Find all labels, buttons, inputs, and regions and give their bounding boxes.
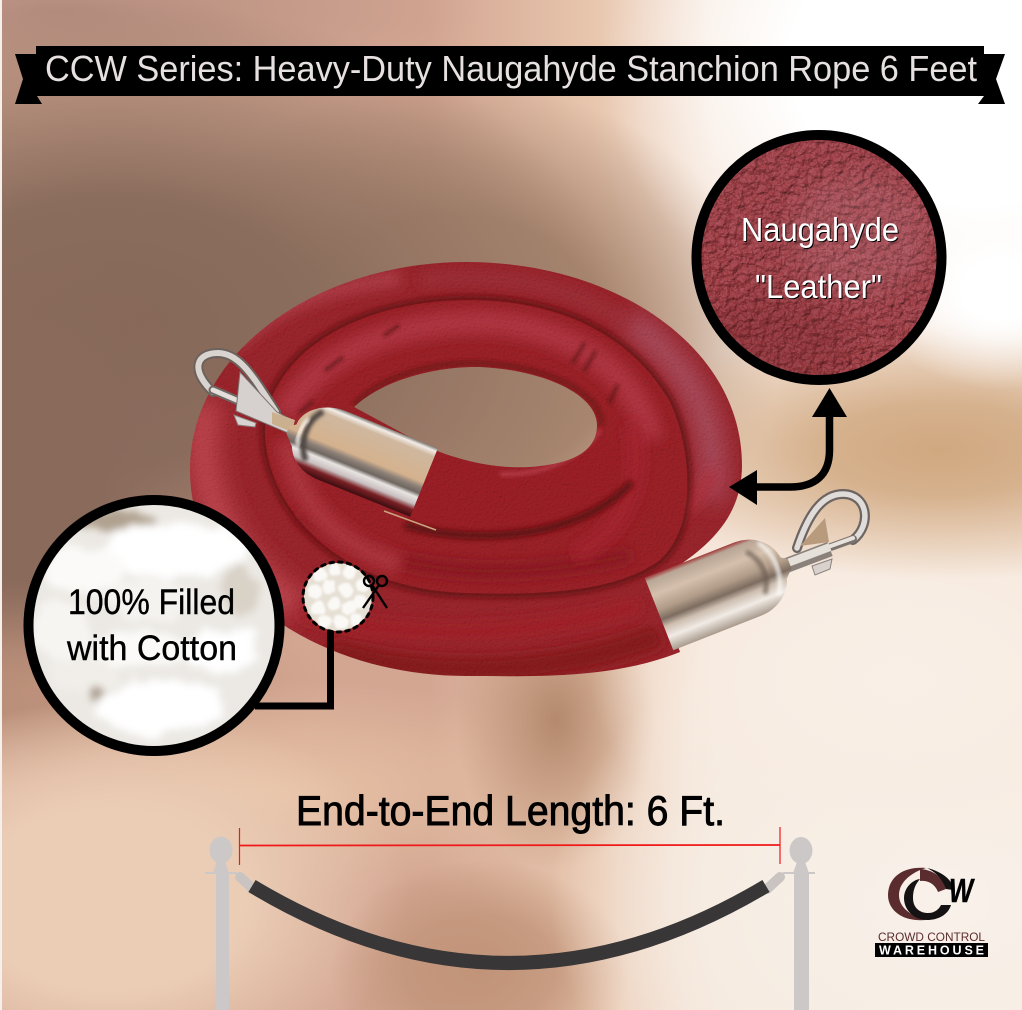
callout text line 2: with Cotton xyxy=(66,629,237,668)
rope wrinkles xyxy=(300,326,617,412)
logo mark black arc xyxy=(904,868,953,920)
cotton filling xyxy=(304,563,372,631)
callout: 100% filled with cotton xyxy=(28,500,280,751)
logo: Crowd Control Warehouse xyxy=(875,868,988,958)
upper rope end: chrome cap and snap hook xyxy=(198,353,438,517)
title text: CCW Series: Heavy-Duty Naugahyde Stanchion Rope 6 Feet xyxy=(45,48,977,89)
chrome cap xyxy=(645,526,804,650)
stanchion post left xyxy=(205,836,237,1010)
logo mark maroon inner arc xyxy=(920,869,946,892)
leather texture xyxy=(702,140,936,375)
cutaway showing cotton filling xyxy=(302,561,387,633)
coiled red rope xyxy=(180,255,750,685)
logo W: W xyxy=(949,872,975,909)
ribbon tail left xyxy=(15,54,42,104)
logo line 1: CROWD CONTROL xyxy=(878,932,986,944)
chrome cap xyxy=(275,394,438,517)
middle coil xyxy=(265,300,687,594)
length heading: End-to-End Length: 6 Ft. xyxy=(296,787,725,834)
leather grain xyxy=(180,255,750,685)
snap hook xyxy=(785,494,865,566)
callout text shadow: Naugahyde xyxy=(742,212,900,249)
banner bar xyxy=(36,46,984,96)
ribbon tail right xyxy=(978,54,1005,104)
logo bar xyxy=(875,943,988,957)
callout text: Naugahyde xyxy=(741,211,899,248)
callout: Naugahyde leather xyxy=(690,134,943,382)
connector line from cutaway to cotton callout xyxy=(255,630,330,706)
cotton photo xyxy=(30,502,278,750)
circle border xyxy=(696,135,942,380)
red dimension line xyxy=(240,827,780,865)
outer coil shading xyxy=(203,400,300,610)
tan reflection under cap xyxy=(384,511,436,530)
circle border xyxy=(28,500,280,751)
lower rope end: chrome cap and snap hook xyxy=(645,494,865,650)
dashed border xyxy=(303,562,373,632)
logo line 2: WAREHOUSE xyxy=(879,944,984,958)
callout text line 1: 100% Filled xyxy=(68,583,235,622)
front rope section xyxy=(405,428,621,537)
black rope illustration xyxy=(240,877,780,963)
title banner xyxy=(15,46,1005,104)
stanchion post right xyxy=(783,837,815,1010)
logo mark maroon crescent xyxy=(888,868,926,920)
upper coil highlight xyxy=(284,322,650,440)
icon: scissors xyxy=(363,576,387,608)
double-headed arrow to Naugahyde callout xyxy=(729,388,847,505)
leather text shadow: "Leather" xyxy=(756,269,883,306)
snap hook xyxy=(198,353,276,412)
leather text: "Leather" xyxy=(755,268,882,305)
coil contact shadow xyxy=(265,300,687,594)
